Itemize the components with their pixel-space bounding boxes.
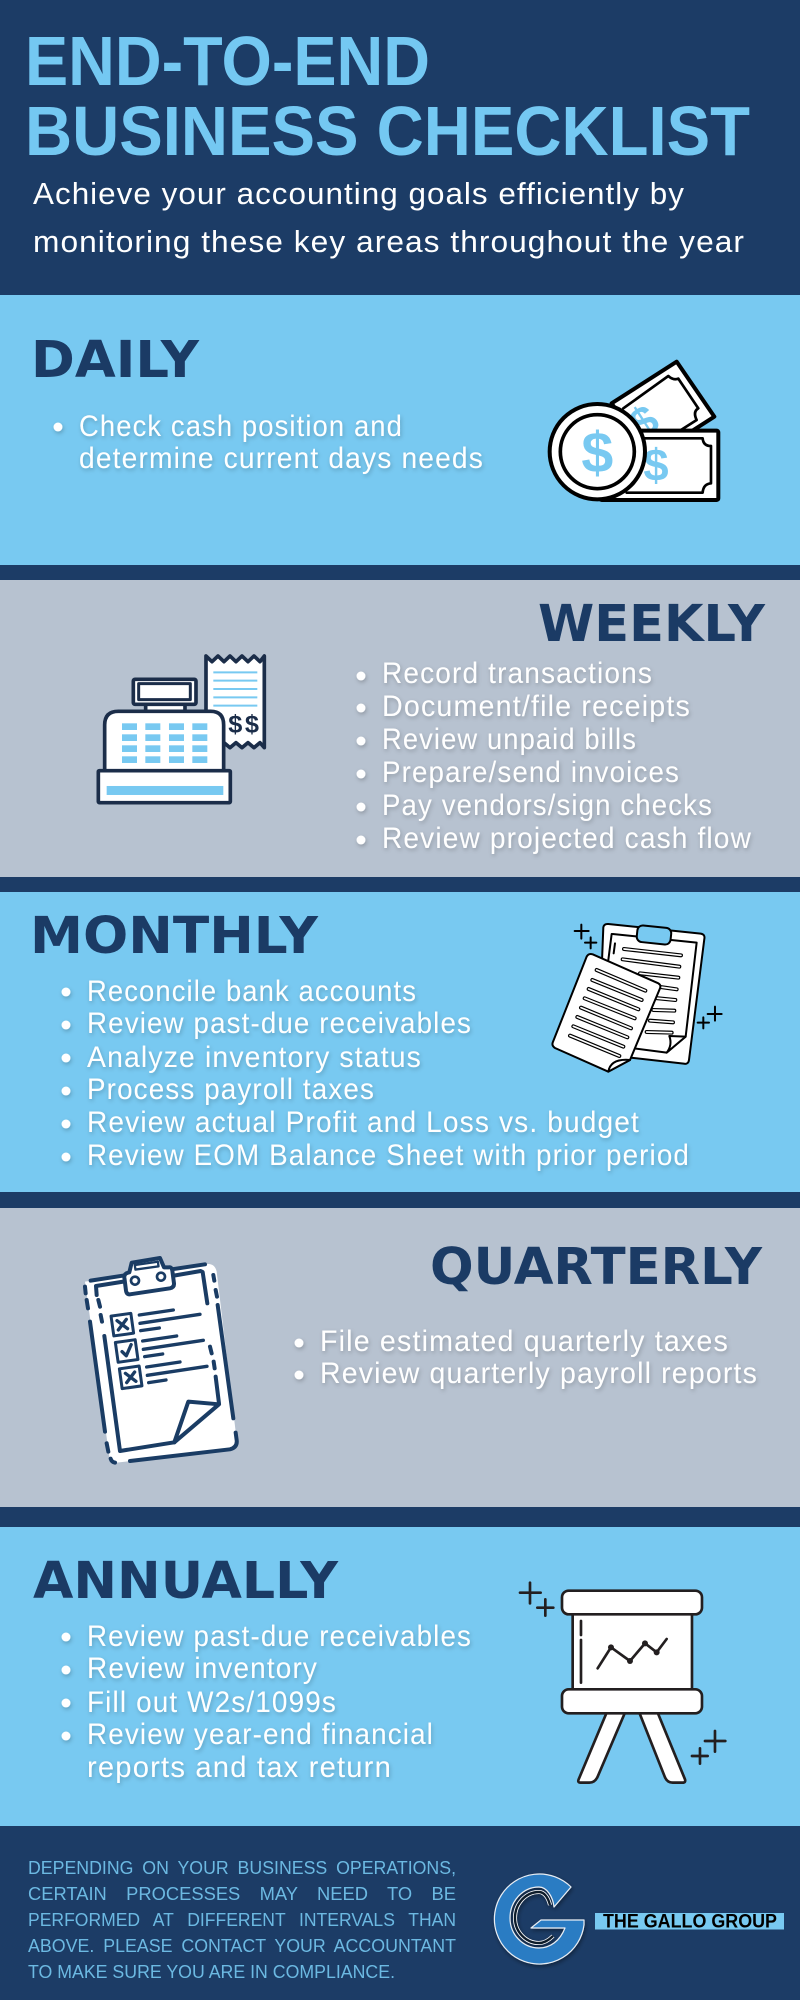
- panel: monthly: [0, 892, 800, 1192]
- list: quarterly tasks: Review quarterly payroll reports: [320, 1357, 758, 1390]
- footer note: PERFORMED AT DIFFERENT INTERVALS THAN: [28, 1910, 456, 1930]
- list: weekly tasks: Review unpaid bills: [382, 723, 637, 756]
- icon: presentation board: [520, 1583, 725, 1783]
- list: daily tasks: [54, 410, 484, 475]
- panel: quarterly: [0, 1208, 800, 1507]
- list: weekly tasks: Review projected cash flow: [382, 822, 752, 855]
- subtitle: [33, 177, 745, 259]
- heading: daily: DAILY: [31, 330, 200, 389]
- list: annual tasks: Fill out W2s/1099s: [87, 1686, 337, 1719]
- heading: quarterly: QUARTERLY: [430, 1237, 763, 1296]
- list: monthly tasks: Review past-due receivables: [87, 1007, 472, 1040]
- footer note: DEPENDING ON YOUR BUSINESS OPERATIONS,: [28, 1858, 456, 1878]
- list: weekly tasks: Record transactions: [382, 657, 653, 690]
- list: monthly tasks: [62, 975, 690, 1172]
- footer note: [28, 1858, 456, 1982]
- heading: annually: ANNUALLY: [33, 1551, 339, 1610]
- footer note: TO MAKE SURE YOU ARE IN COMPLIANCE.: [28, 1962, 395, 1982]
- list: monthly tasks: Process payroll taxes: [87, 1073, 375, 1106]
- list: weekly tasks: [356, 657, 752, 855]
- list: annual tasks: reports and tax return: [87, 1751, 392, 1784]
- icon: clipboard checklist: [85, 1258, 237, 1463]
- list: quarterly tasks: [294, 1325, 758, 1390]
- title: BUSINESS CHECKLIST: [25, 92, 750, 170]
- subtitle: Achieve your accounting goals efficiently by: [33, 177, 685, 211]
- title: [25, 22, 750, 170]
- list: monthly tasks: Review EOM Balance Sheet with prior period: [87, 1139, 690, 1172]
- list: weekly tasks: Pay vendors/sign checks: [382, 789, 713, 822]
- panel: annually: [0, 1527, 800, 1826]
- list: annual tasks: [62, 1620, 472, 1784]
- panel: footer: [0, 1826, 800, 2000]
- logo: G mark: [494, 1874, 584, 1964]
- list: daily tasks: Check cash position and: [79, 410, 403, 443]
- logo: The Gallo Group wordmark: THE GALLO GROUP: [603, 1912, 777, 1932]
- heading: weekly: WEEKLY: [538, 594, 766, 653]
- list: quarterly tasks: File estimated quarterly taxes: [320, 1325, 729, 1358]
- footer note: CERTAIN PROCESSES MAY NEED TO BE: [28, 1884, 456, 1904]
- list: monthly tasks: Review actual Profit and Loss vs. budget: [87, 1106, 640, 1139]
- heading: monthly: MONTHLY: [30, 906, 320, 965]
- list: annual tasks: Review inventory: [87, 1652, 318, 1685]
- icon: cash register and receipt: [98, 656, 264, 803]
- panel: daily: [0, 295, 800, 565]
- list: annual tasks: Review year-end financial: [87, 1718, 434, 1751]
- icon: money: $: [581, 421, 613, 485]
- list: weekly tasks: Document/file receipts: [382, 690, 691, 723]
- icon: money: $: [621, 396, 668, 449]
- title: END-TO-END: [25, 22, 430, 100]
- list: weekly tasks: Prepare/send invoices: [382, 756, 680, 789]
- icon: cash register and receipt: $: [245, 711, 259, 739]
- subtitle: monitoring these key areas throughout the year: [33, 225, 745, 259]
- list: monthly tasks: Reconcile bank accounts: [87, 975, 417, 1008]
- icon: money: [550, 362, 718, 500]
- list: annual tasks: Review past-due receivables: [87, 1620, 472, 1653]
- panel: header: [0, 0, 800, 295]
- icon: money: $: [643, 440, 669, 491]
- icon: documents on clipboard: [552, 924, 722, 1072]
- list: monthly tasks: Analyze inventory status: [87, 1041, 422, 1074]
- panel: weekly: [0, 580, 800, 877]
- list: daily tasks: determine current days needs: [79, 442, 484, 475]
- footer note: ABOVE. PLEASE CONTACT YOUR ACCOUNTANT: [28, 1936, 456, 1956]
- icon: cash register and receipt: $: [228, 711, 242, 739]
